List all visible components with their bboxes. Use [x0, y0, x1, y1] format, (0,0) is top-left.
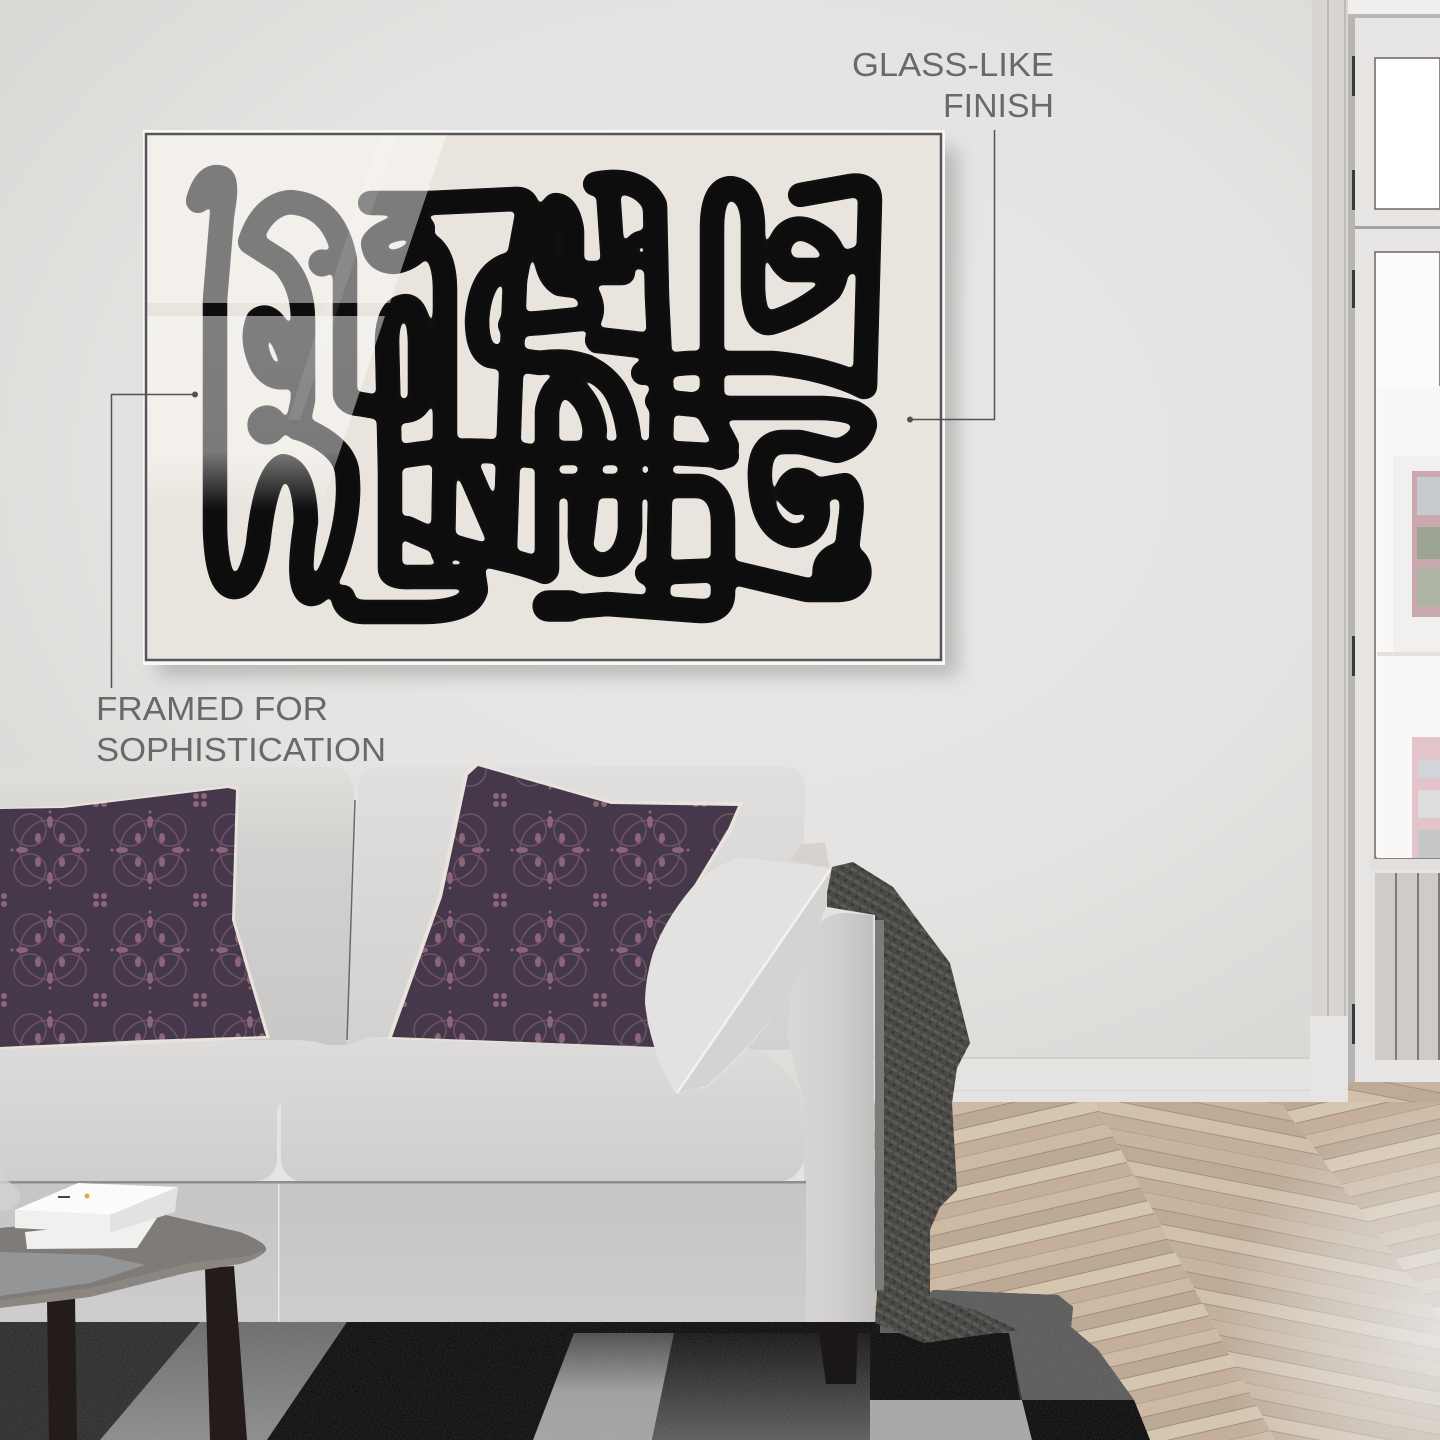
callout dot [907, 416, 913, 422]
glass reflection [146, 134, 447, 510]
callout text [852, 46, 1054, 124]
left seat cushion [0, 1040, 338, 1181]
window frame [1348, 0, 1440, 1082]
lower book [25, 1218, 157, 1249]
striped rug [0, 1285, 1160, 1440]
herringbone wood floor [840, 1082, 1440, 1440]
window trim [1310, 0, 1348, 1102]
sofa [0, 767, 875, 1384]
callout text [96, 690, 386, 768]
canvas [146, 134, 941, 660]
table legs [47, 1266, 247, 1440]
right seat cushion [281, 1037, 805, 1182]
coffee table [0, 1213, 266, 1440]
upper book [15, 1183, 178, 1233]
callout leader line [112, 394, 195, 688]
right purple pillow [387, 763, 743, 1047]
lower wood panel [1370, 859, 1440, 1060]
sofa arm [787, 913, 875, 1322]
callout leader line [910, 130, 994, 420]
callout: framed for sophistication [96, 392, 386, 768]
left back cushion [0, 767, 354, 1045]
sofa leg [817, 1318, 858, 1384]
knit throw blanket [827, 862, 1018, 1343]
callout: glass-like finish [852, 46, 1054, 422]
art frame outline [146, 134, 941, 660]
frame shadow [158, 148, 958, 676]
right back cushion [346, 767, 805, 1050]
marble table top [0, 1213, 266, 1307]
white frame [143, 130, 945, 665]
window [1310, 0, 1440, 1102]
right sofa base [279, 1182, 806, 1322]
wall [0, 0, 1440, 1102]
callout text: SOPHISTICATION [96, 731, 386, 768]
glass on table [0, 1170, 20, 1212]
left sofa base [0, 1182, 278, 1322]
framed artwork [143, 130, 958, 676]
stacked books [15, 1183, 178, 1249]
main pane with building view [1375, 252, 1440, 858]
callout dot [192, 392, 198, 398]
left purple pillow [0, 786, 270, 1049]
callout text: GLASS-LIKE [852, 46, 1054, 83]
top pane [1375, 58, 1440, 209]
callout text: FRAMED FOR [96, 690, 328, 727]
white pillow [645, 842, 832, 1093]
door hinges [1352, 56, 1355, 1044]
baseboard [870, 1057, 1315, 1102]
black brush strokes [198, 177, 870, 612]
callout text: FINISH [943, 87, 1054, 124]
